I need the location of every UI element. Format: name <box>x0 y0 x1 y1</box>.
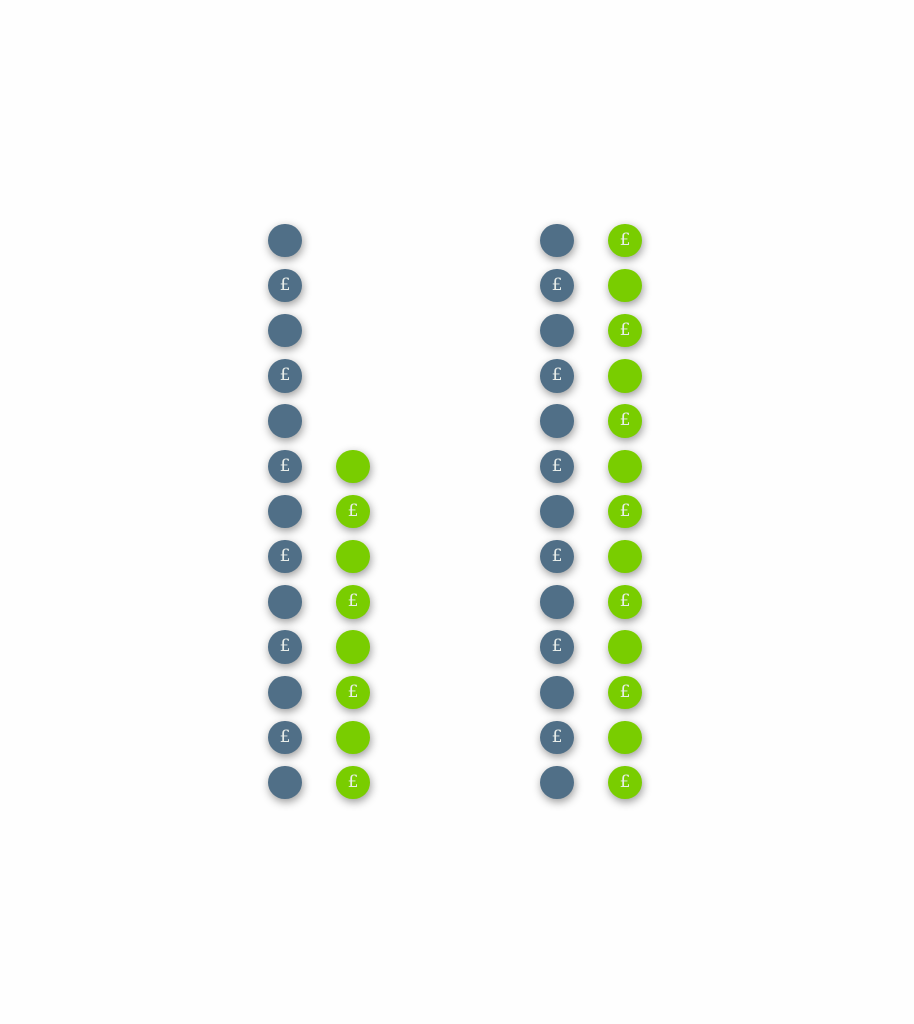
coin <box>608 269 642 302</box>
coin <box>268 404 302 438</box>
coin with pound sign <box>268 540 302 573</box>
coin <box>268 766 302 799</box>
coin with pound sign: £ <box>280 365 290 385</box>
coin with pound sign <box>540 359 574 393</box>
coin with pound sign: £ <box>552 546 562 566</box>
coin <box>336 721 370 754</box>
coin <box>268 676 302 709</box>
coin <box>608 359 642 393</box>
coin with pound sign: £ <box>280 275 290 295</box>
coin with pound sign <box>268 450 302 483</box>
coin with pound sign <box>608 314 642 347</box>
coin with pound sign: £ <box>552 456 562 476</box>
coin <box>336 450 370 483</box>
coin with pound sign: £ <box>620 410 630 430</box>
chart: first group, green column <box>332 448 376 808</box>
coin <box>608 540 642 573</box>
coin with pound sign <box>336 585 370 619</box>
chart: second group, blue column <box>536 222 580 808</box>
coin <box>540 495 574 528</box>
coin <box>268 495 302 528</box>
coin with pound sign <box>268 630 302 664</box>
coin <box>268 314 302 347</box>
coin <box>540 585 574 619</box>
coin with pound sign: £ <box>620 230 630 250</box>
coin <box>336 630 370 664</box>
coin with pound sign: £ <box>620 320 630 340</box>
coin <box>540 224 574 257</box>
coin with pound sign <box>336 676 370 709</box>
coin with pound sign <box>540 540 574 573</box>
coin <box>540 766 574 799</box>
coin with pound sign <box>540 630 574 664</box>
coin <box>608 450 642 483</box>
coin with pound sign <box>608 224 642 257</box>
coin with pound sign: £ <box>280 727 290 747</box>
coin <box>540 676 574 709</box>
coin with pound sign <box>268 721 302 754</box>
coin with pound sign <box>336 766 370 799</box>
coin <box>540 404 574 438</box>
coin with pound sign <box>540 269 574 302</box>
coin with pound sign: £ <box>348 682 358 702</box>
coin with pound sign: £ <box>348 772 358 792</box>
coin with pound sign <box>540 450 574 483</box>
coin with pound sign: £ <box>280 456 290 476</box>
coin <box>540 314 574 347</box>
coin <box>268 224 302 257</box>
coin with pound sign: £ <box>280 636 290 656</box>
chart: second group, green column <box>604 222 648 808</box>
coin with pound sign: £ <box>620 772 630 792</box>
coin with pound sign: £ <box>620 591 630 611</box>
coin with pound sign: £ <box>552 636 562 656</box>
coin with pound sign <box>540 721 574 754</box>
coin with pound sign: £ <box>348 591 358 611</box>
coin with pound sign <box>608 495 642 528</box>
coin with pound sign <box>608 766 642 799</box>
coin <box>268 585 302 619</box>
coin with pound sign: £ <box>552 365 562 385</box>
coin with pound sign: £ <box>552 727 562 747</box>
coin with pound sign <box>608 585 642 619</box>
coin with pound sign <box>268 359 302 393</box>
coin with pound sign <box>608 676 642 709</box>
coin with pound sign <box>608 404 642 438</box>
coin with pound sign <box>268 269 302 302</box>
coin with pound sign: £ <box>620 501 630 521</box>
chart: first group, blue column <box>264 222 308 808</box>
coin with pound sign: £ <box>552 275 562 295</box>
coin with pound sign <box>336 495 370 528</box>
coin with pound sign: £ <box>348 501 358 521</box>
coin with pound sign: £ <box>620 682 630 702</box>
coin <box>608 630 642 664</box>
coin with pound sign: £ <box>280 546 290 566</box>
coin <box>608 721 642 754</box>
coin <box>336 540 370 573</box>
